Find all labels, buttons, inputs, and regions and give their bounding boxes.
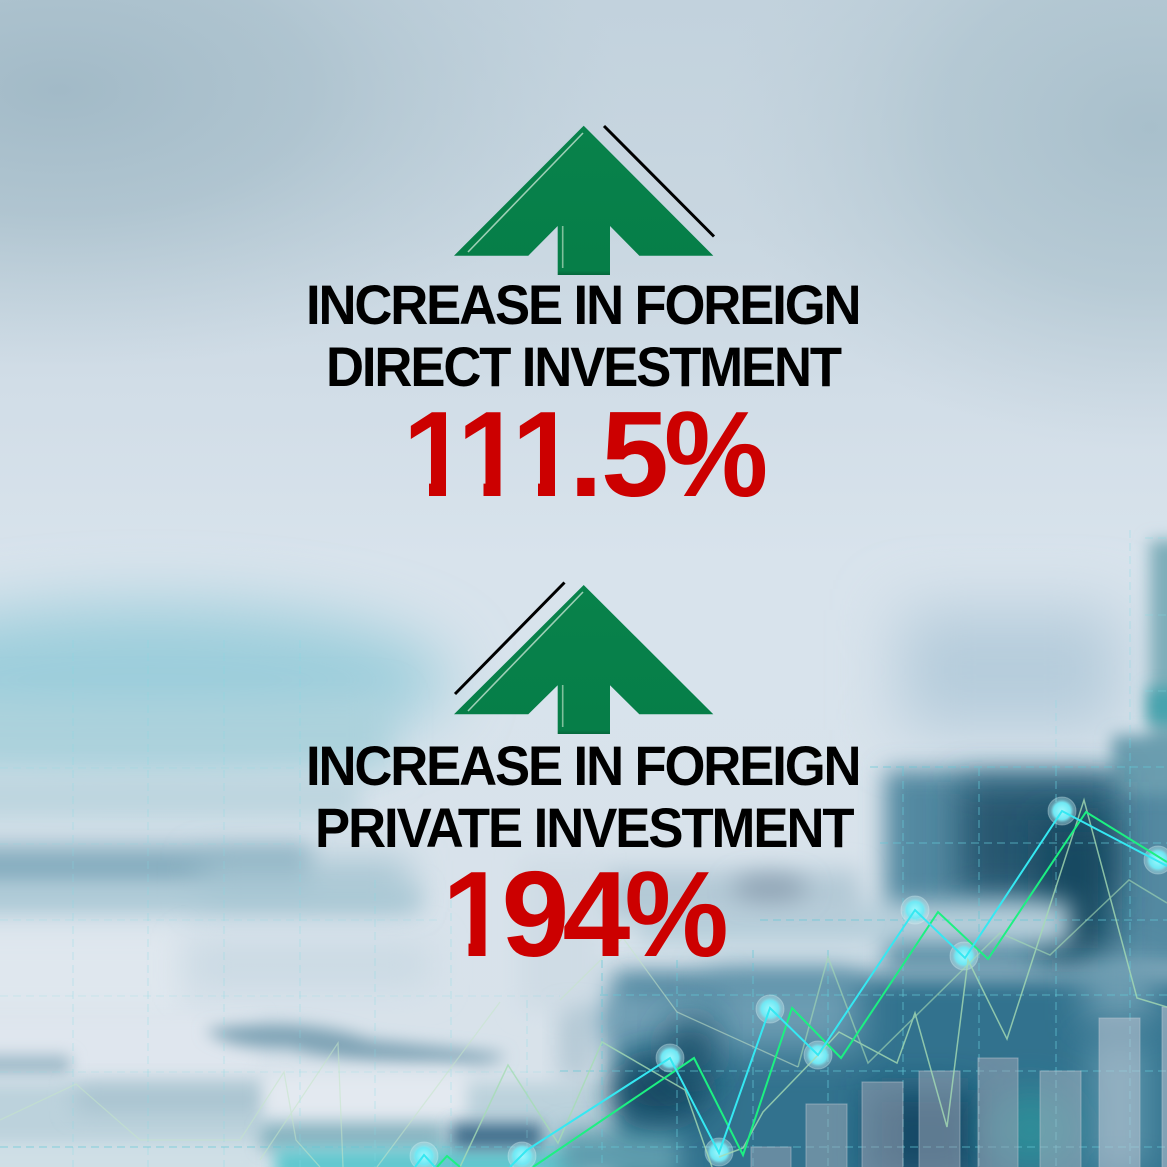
value: 194%: 1 (442, 846, 510, 982)
value: 194% (450, 870, 726, 957)
heading: increase in foreign direct investment: INCREASE IN FOREIGN (306, 274, 862, 336)
value: 111.5%: 1 (512, 386, 579, 522)
value: 111.5% (410, 411, 766, 497)
glowing data points (410, 797, 1167, 1167)
heading: increase in foreign direct investment: DIRECT INVESTMENT (326, 336, 842, 398)
heading: increase in foreign private investment: INCREASE IN FOREIGN (306, 735, 862, 797)
green line (437, 1156, 460, 1167)
heading: increase in foreign private investment (306, 735, 862, 859)
lower mass (615, 975, 1167, 1167)
cyan line (415, 1155, 435, 1167)
heading: increase in foreign direct investment (306, 274, 862, 398)
value: 111.5%: 1 (457, 386, 525, 522)
heading: increase in foreign private investment: PRIVATE INVESTMENT (315, 797, 855, 859)
right upper soft block (900, 610, 1120, 730)
value: 194%: % (624, 847, 729, 983)
left bottom strips (205, 1024, 505, 1063)
icon: green up arrow with left accent line (454, 582, 713, 734)
icon: green up arrow with right accent line (454, 126, 714, 275)
faint trend lines (0, 938, 798, 1167)
second statistic block (306, 582, 862, 983)
light horizontal band (640, 902, 1070, 944)
first statistic block (306, 126, 862, 523)
value: 111.5%: % (664, 387, 768, 523)
building mass (885, 770, 1167, 970)
bar chart (751, 1007, 1167, 1167)
left teal haze (0, 605, 450, 755)
value: 111.5%: .5 (569, 386, 669, 522)
line chart (0, 800, 1167, 1167)
value: 111.5%: 1 (402, 386, 470, 522)
value: 194%: 94 (502, 846, 630, 982)
